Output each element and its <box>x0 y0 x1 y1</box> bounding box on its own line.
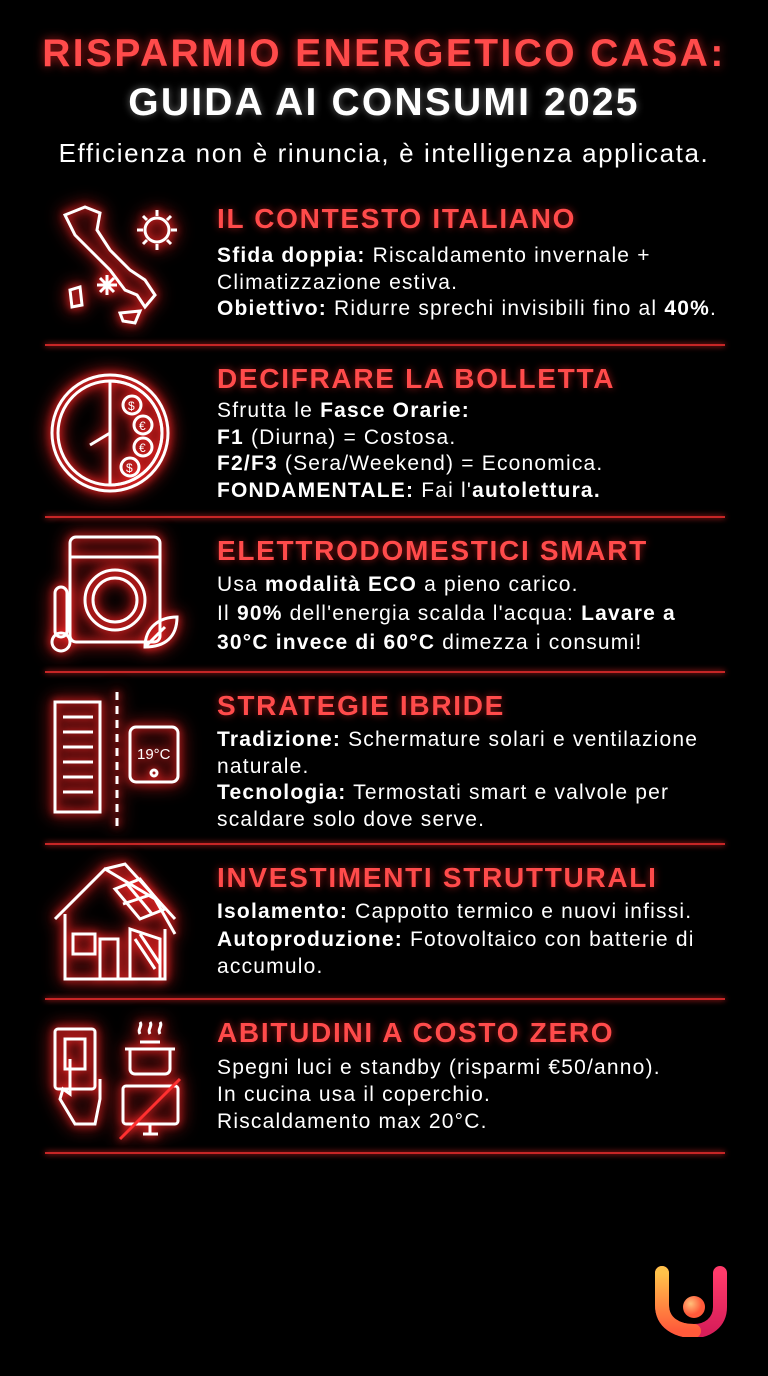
body text: Tradizione: Schermature solari e ventilazione <box>217 728 698 751</box>
heading: ELETTRODOMESTICI SMART <box>217 535 648 566</box>
body text <box>217 728 698 830</box>
body text: naturale. <box>217 754 310 778</box>
title: RISPARMIO ENERGETICO CASA: <box>42 32 726 75</box>
icon: shutter thermostat <box>38 683 194 834</box>
heading: DECIFRARE LA BOLLETTA <box>217 363 615 394</box>
body text: Tecnologia: Termostati smart e valvole per <box>217 781 669 804</box>
body text <box>217 573 676 654</box>
logo <box>655 1266 727 1337</box>
panel: investimenti <box>44 850 695 995</box>
body text: Riscaldamento max 20°C. <box>217 1110 488 1133</box>
body text: Sfida doppia: Riscaldamento invernale + <box>217 244 651 267</box>
body text: F1 (Diurna) = Costosa. <box>217 426 456 448</box>
body text: Isolamento: Cappotto termico e nuovi infissi. <box>217 900 692 923</box>
body text <box>217 1056 661 1133</box>
body text: Usa modalità ECO a pieno carico. <box>217 573 579 596</box>
body text: Obiettivo: Ridurre sprechi invisibili fino al 40%. <box>217 297 717 320</box>
body text: Spegni luci e standby (risparmi €50/anno). <box>217 1056 661 1079</box>
panel: elettrodomestici <box>37 521 676 665</box>
body text <box>217 244 717 320</box>
subtitle heading: GUIDA AI CONSUMI 2025 <box>128 81 640 124</box>
panel: contesto italiano <box>52 192 717 338</box>
panel: strategie ibride <box>38 683 698 834</box>
body text <box>217 900 695 978</box>
icon: clock: € <box>139 419 146 433</box>
icon: switch pot monitor <box>38 1010 194 1149</box>
heading: INVESTIMENTI STRUTTURALI <box>217 862 658 893</box>
body text: FONDAMENTALE: Fai l'autolettura. <box>217 478 601 502</box>
body text: accumulo. <box>217 955 324 978</box>
body text: Sfrutta le Fasce Orarie: <box>217 399 470 422</box>
icon: house solar <box>44 850 188 995</box>
icon: italy sun snow <box>52 192 188 338</box>
body text: In cucina usa il coperchio. <box>217 1083 491 1106</box>
body text: scaldare solo dove serve. <box>217 808 485 830</box>
panel: bolletta <box>36 358 616 508</box>
heading: STRATEGIE IBRIDE <box>217 690 505 721</box>
panel: abitudini <box>38 1010 661 1149</box>
body text: F2/F3 (Sera/Weekend) = Economica. <box>217 452 603 475</box>
icon: clock: $ <box>128 399 135 413</box>
body text: Autoproduzione: Fotovoltaico con batterie di <box>217 928 695 950</box>
icon: washing machine <box>37 521 192 665</box>
body text <box>217 399 603 502</box>
icon: clock: $ <box>126 461 133 475</box>
icon: clock <box>36 358 184 508</box>
icon: shutter thermostat: 19°C <box>137 746 171 763</box>
heading: ABITUDINI A COSTO ZERO <box>217 1017 614 1048</box>
body text: Climatizzazione estiva. <box>217 270 458 294</box>
icon: clock: € <box>139 441 146 455</box>
body text: Il 90% dell'energia scalda l'acqua: Lavare a <box>217 602 676 625</box>
heading: IL CONTESTO ITALIANO <box>217 203 576 234</box>
tagline: Efficienza non è rinuncia, è intelligenza applicata. <box>59 138 709 168</box>
body text: 30°C invece di 60°C dimezza i consumi! <box>217 631 642 654</box>
